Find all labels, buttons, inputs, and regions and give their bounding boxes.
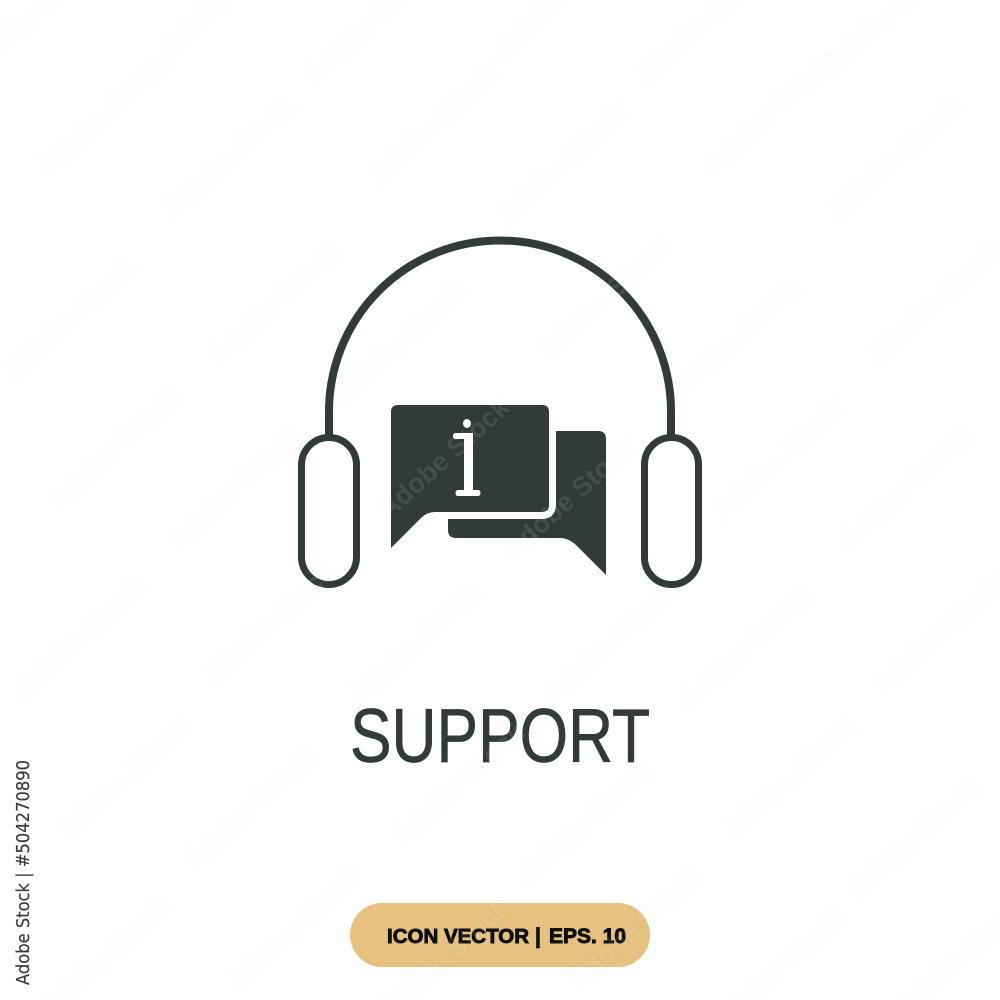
- watermark pattern: Adobe Stock: [563, 861, 706, 995]
- watermark pattern: Adobe Stock: [53, 711, 196, 845]
- watermark pattern: Adobe Stock: [373, 391, 516, 525]
- watermark pattern: Adobe Stock: [0, 251, 141, 385]
- watermark pattern: Adobe Stock: [533, 231, 676, 365]
- icon: info letter i: [453, 419, 480, 496]
- watermark pattern: Adobe Stock: [8, 571, 151, 705]
- icon: right ear pad: [644, 438, 698, 584]
- watermark pattern: Adobe Stock: [31, 48, 174, 182]
- icon: headband: [329, 241, 671, 438]
- badge background: [350, 903, 650, 967]
- watermark pattern: Adobe Stock: [491, 96, 634, 230]
- watermark pattern: Adobe Stock: [498, 431, 641, 565]
- watermark pattern: Adobe Stock: [843, 771, 986, 905]
- watermark pattern: Adobe Stock: [203, 236, 346, 370]
- watermark pattern: Adobe Stock: [823, 91, 966, 225]
- watermark pattern: Adobe Stock: [163, 421, 306, 555]
- side credit: Adobe Stock | #504270890: [14, 760, 34, 985]
- watermark pattern: Adobe Stock: [513, 756, 656, 890]
- badge label: |: [535, 925, 541, 948]
- watermark pattern: Adobe Stock: [158, 89, 301, 223]
- watermark pattern: Adobe Stock: [343, 576, 486, 710]
- watermark pattern: Adobe Stock: [43, 381, 186, 515]
- watermark pattern: Adobe Stock: [673, 581, 816, 715]
- badge: icon vector: [350, 903, 650, 967]
- title: SUPPORT: [350, 694, 650, 779]
- icon: front speech bubble: [391, 405, 549, 548]
- badge label: ICON VECTOR: [387, 925, 529, 948]
- watermark pattern: Adobe Stock: [178, 741, 321, 875]
- watermark pattern: Adobe Stock: [833, 421, 976, 555]
- watermark pattern: Adobe Stock: [388, 716, 531, 850]
- icon: headset with speech bubbles: [302, 241, 698, 585]
- watermark pattern: Adobe Stock: [663, 271, 806, 405]
- icon: back speech bubble: [448, 431, 606, 575]
- watermark pattern: Adobe Stock: [698, 46, 841, 180]
- watermark pattern: Adobe Stock: [538, 576, 681, 710]
- watermark pattern: Adobe Stock: [198, 556, 341, 690]
- badge label: EPS. 10: [549, 925, 626, 948]
- watermark pattern: Adobe Stock: [718, 711, 861, 845]
- watermark pattern: Adobe Stock: [708, 391, 851, 525]
- icon: left ear pad: [302, 438, 356, 584]
- watermark pattern: Adobe Stock: [363, 56, 506, 190]
- watermark pattern: Adobe Stock: [328, 276, 471, 410]
- watermark pattern: Adobe Stock: [223, 861, 366, 995]
